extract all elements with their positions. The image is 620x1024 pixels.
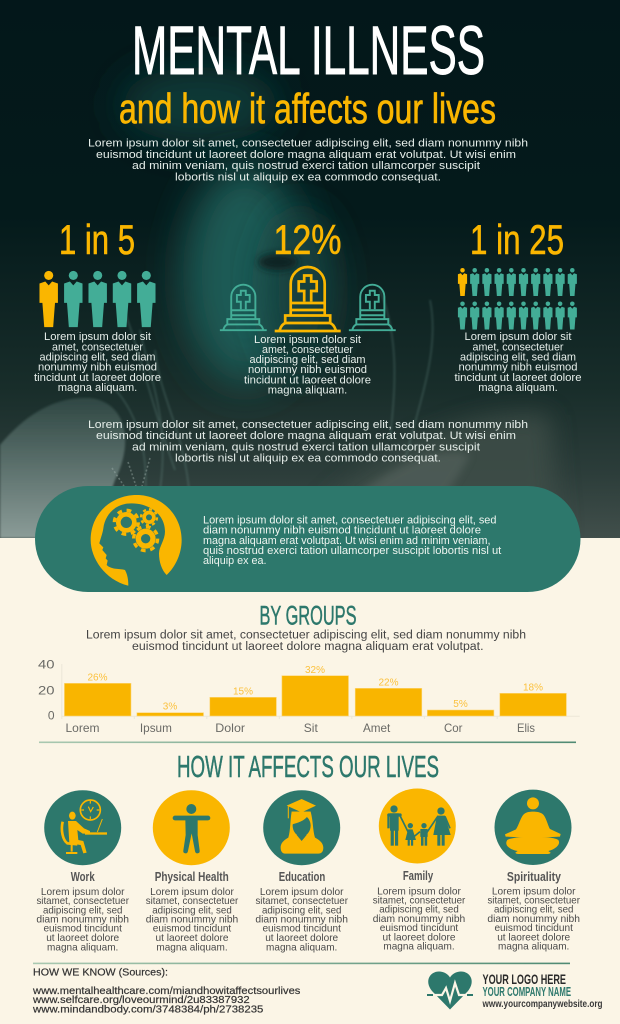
icon: family (379, 788, 456, 864)
panel: education (255, 790, 349, 953)
description: sitamet, consectetuer (487, 895, 581, 906)
description (146, 887, 239, 953)
label: Work (71, 869, 95, 884)
label: Family (403, 868, 434, 883)
description: Lorem ipsum dolor (150, 887, 234, 898)
y axis labels: 20 (38, 684, 55, 698)
sources list (32, 985, 300, 1015)
callout text: quis nostrud exerci tation ullamcorper suscipit lobortis nisl ut (203, 545, 502, 557)
description: magna aliquam. (266, 942, 337, 953)
logo name: YOUR LOGO HERE (482, 971, 566, 987)
intro paragraph: Lorem ipsum dolor sit amet, consectetuer adipiscing elit, sed diam nonummy nibh (88, 138, 528, 150)
category labels: Ipsum (140, 721, 172, 735)
second paragraph: euismod tincidunt ut laoreet dolore magna aliquam erat volutpat. Ut wisi enim (96, 430, 516, 442)
stat description: tincidunt ut laoreet dolore (34, 372, 161, 384)
stat description (34, 331, 161, 394)
panel: physical health (146, 790, 239, 953)
people grid: one in twenty-five highlighted (458, 268, 577, 330)
callout text: aliquip ex ea. (203, 555, 266, 567)
stat description: nonummy nibh euismod (248, 364, 367, 376)
sources heading: HOW WE KNOW (Sources): (33, 968, 168, 978)
stat description: adipiscing elit, sed diam (460, 352, 576, 364)
category labels: Amet (363, 721, 391, 735)
category labels: Lorem (66, 721, 100, 735)
description: diam nonummy nibh (255, 914, 348, 926)
sources list: www.mindandbody.com/3748384/ph/2738235 (32, 1003, 264, 1015)
description (36, 887, 130, 953)
label: Spirituality (507, 869, 562, 884)
description: adipiscing elit, sed (379, 905, 459, 916)
second paragraph (88, 419, 528, 464)
intro paragraph: ad minim veniam, quis nostrud exerci tation ullamcorper suscipit (132, 160, 481, 172)
description: euismod tincidunt (262, 924, 341, 934)
description: diam nonummy nibh (36, 914, 129, 926)
stat description (244, 334, 371, 396)
description: euismod tincidunt (494, 923, 573, 934)
by groups description: euismod tincidunt ut laoreet dolore magna aliquam erat volutpat. (132, 641, 484, 653)
icon: work (44, 790, 121, 865)
stat description: amet, consectetuer (472, 342, 564, 354)
description: magna aliquam. (47, 942, 118, 953)
category labels: Elis (517, 721, 535, 735)
value labels: 5% (453, 699, 468, 710)
y axis labels: 40 (38, 658, 55, 672)
callout text: magna aliquam erat volutpat. Ut wisi enim ad minim veniam, (203, 535, 490, 547)
icon: spirituality (494, 790, 572, 865)
description: euismod tincidunt (380, 923, 458, 934)
description: sitamet, consectetuer (36, 896, 130, 907)
stat: 1 in 5 (34, 216, 161, 394)
second paragraph: Lorem ipsum dolor sit amet, consectetuer adipiscing elit, sed diam nonummy nibh (88, 419, 528, 431)
stat description (454, 331, 582, 394)
intro paragraph: euismod tincidunt ut laoreet dolore magna aliquam erat volutpat. Ut wisi enim (96, 149, 516, 161)
bar chart (38, 658, 580, 735)
stat: 12% (220, 216, 396, 396)
stat description: amet, consectetuer (262, 344, 353, 356)
background photo (0, 0, 620, 538)
icon: head with gears (91, 495, 182, 586)
value labels: 18% (523, 682, 543, 694)
stat number: 12% (274, 216, 342, 263)
description: ut laoreet dolore (265, 933, 339, 944)
value labels: 22% (378, 678, 399, 688)
heading: by groups: BY GROUPS (260, 600, 356, 630)
y axis labels: 0 (48, 708, 55, 722)
stat description: tincidunt ut laoreet dolore (244, 374, 371, 386)
icon: heart with pulse (427, 972, 473, 1010)
label: Physical Health (155, 869, 229, 884)
description: euismod tincidunt (153, 924, 231, 934)
stat description: tincidunt ut laoreet dolore (454, 372, 582, 384)
panel: family (373, 788, 466, 953)
description: diam nonummy nibh (146, 914, 238, 926)
subtitle: and how it affects our lives (119, 85, 496, 132)
description: Lorem ipsum dolor (41, 887, 125, 898)
stat: 1 in 25 (454, 216, 582, 394)
value labels: 15% (233, 686, 253, 698)
by groups description: Lorem ipsum dolor sit amet, consectetuer adipiscing elit, sed diam nonummy nibh (86, 630, 526, 642)
value labels (87, 665, 543, 713)
panel: spirituality (487, 790, 581, 953)
category labels: Sit (304, 721, 318, 735)
description: diam nonummy nibh (373, 914, 465, 925)
stat number: 1 in 25 (470, 216, 564, 263)
description: ut laoreet dolore (497, 932, 571, 943)
stat description: Lorem ipsum dolor sit (254, 334, 362, 346)
description: ut laoreet dolore (382, 932, 456, 943)
cream lower background (0, 538, 620, 1024)
panel: head callout pill (35, 486, 580, 592)
stat description: magna aliquam. (478, 382, 558, 394)
stat description: amet, consectetuer (52, 342, 143, 354)
description: Lorem ipsum dolor (492, 886, 576, 897)
description: sitamet, consectetuer (255, 896, 349, 907)
category labels: Dolor (215, 721, 245, 735)
description: magna aliquam. (156, 942, 228, 953)
callout text: Lorem ipsum dolor sit amet, consectetuer adipiscing elit, sed (203, 514, 496, 526)
icon: physical health (153, 790, 230, 865)
description: ut laoreet dolore (156, 933, 229, 944)
stat description: adipiscing elit, sed diam (40, 352, 156, 364)
label: Education (279, 869, 325, 884)
stat description: Lorem ipsum dolor sit (464, 331, 572, 343)
description: Lorem ipsum dolor (260, 887, 344, 898)
description: euismod tincidunt (43, 924, 122, 934)
second paragraph: lobortis nisl ut aliquip ex ea commodo consequat. (175, 452, 441, 464)
sources list: www.selfcare.org/loveourmind/2u83387932 (32, 994, 250, 1006)
description: sitamet, consectetuer (146, 896, 239, 907)
heading: how it affects our lives: HOW IT AFFECTS OUR LIVES (177, 749, 439, 784)
description: adipiscing elit, sed (262, 905, 342, 916)
panel: work (36, 790, 130, 953)
stat number: 1 in 5 (59, 216, 135, 263)
category labels (66, 721, 535, 735)
description: adipiscing elit, sed (494, 905, 574, 916)
description: magna aliquam. (498, 942, 569, 953)
stat description: nonummy nibh euismod (38, 362, 157, 374)
callout text: diam nonummy nibh euismod tincidunt ut laoreet dolore (203, 524, 481, 536)
description: Lorem ipsum dolor (377, 886, 461, 897)
intro paragraph (88, 138, 528, 184)
description: magna aliquam. (383, 942, 455, 953)
value labels: 32% (305, 665, 325, 676)
gravestone icons (220, 267, 396, 331)
second paragraph: ad minim veniam, quis nostrud exerci tation ullamcorper suscipit (132, 441, 481, 453)
description: sitamet, consectetuer (373, 895, 466, 906)
company logo (427, 971, 602, 1010)
description: ut laoreet dolore (46, 933, 120, 944)
stat description: adipiscing elit, sed diam (250, 354, 366, 366)
value labels: 26% (87, 672, 108, 684)
intro paragraph: lobortis nisl ut aliquip ex ea commodo consequat. (175, 172, 441, 184)
bars (64, 676, 566, 716)
stat description: magna aliquam. (268, 384, 347, 396)
description (255, 887, 349, 953)
sources list: www.mentalhealthcare.com/miandhowitaffectsourlives (32, 985, 300, 997)
stat description: Lorem ipsum dolor sit (44, 331, 152, 343)
stat description: magna aliquam. (58, 382, 137, 394)
description (373, 886, 466, 953)
y axis labels (38, 658, 55, 722)
description: adipiscing elit, sed (152, 905, 232, 916)
icon: education (263, 790, 340, 865)
category labels: Cor (444, 721, 462, 735)
stat description: nonummy nibh euismod (458, 362, 578, 374)
by groups description (86, 630, 526, 653)
description: adipiscing elit, sed (43, 905, 123, 916)
value labels: 3% (163, 702, 177, 713)
callout text (203, 514, 502, 567)
description: diam nonummy nibh (487, 914, 580, 925)
people icons: one in five highlighted (39, 271, 156, 327)
description (487, 886, 581, 953)
